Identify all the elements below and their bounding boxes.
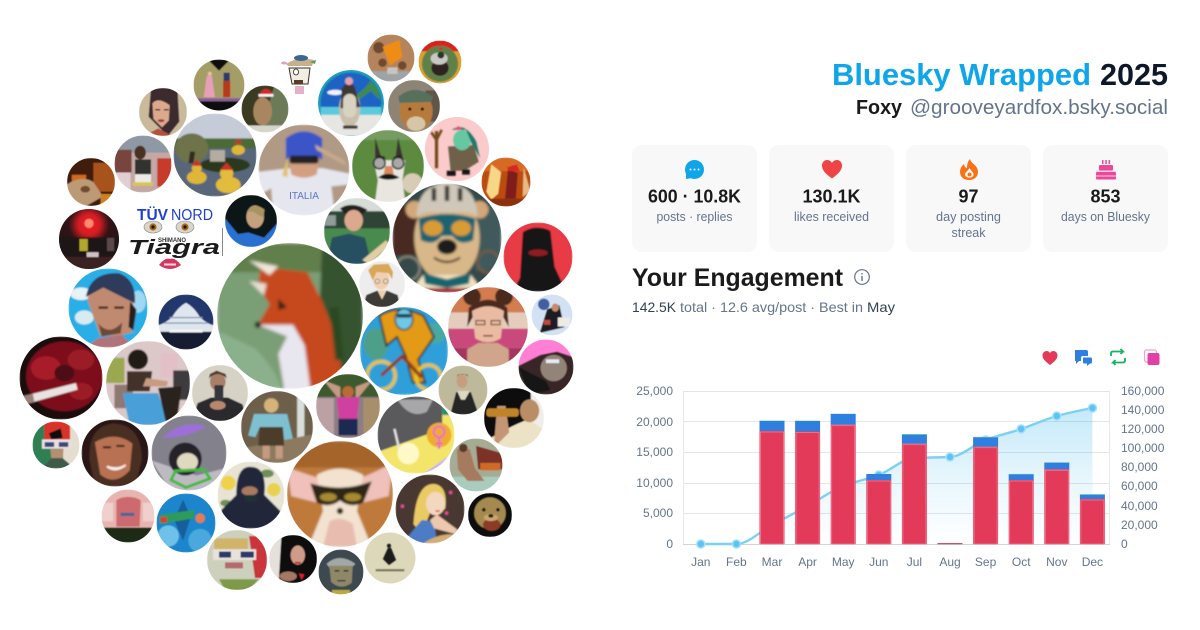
month labels: May: [832, 555, 855, 569]
month labels: Oct: [1012, 555, 1031, 569]
avatar: footballer portrait: [225, 195, 277, 247]
left axis labels: 25,000: [636, 384, 673, 398]
avatar: ducks on island: [174, 114, 256, 196]
month labels: Mar: [762, 555, 782, 569]
avatar: cyclist in Italia kit: ITALIA: [289, 191, 319, 202]
bar: December: [1080, 494, 1105, 544]
left axis labels: [636, 384, 673, 551]
avatar: man with cricket bat: [324, 198, 390, 264]
cumulative line: [701, 408, 1092, 544]
avatar: blue star scene: [156, 494, 216, 552]
stat card: likes received: likes received: [794, 210, 869, 224]
icon: quotes legend: [1144, 350, 1160, 365]
month labels: Dec: [1082, 555, 1103, 569]
avatar: TÜV NORD Shimano Tiagra logo: NORD: [171, 207, 213, 224]
stat card: days on Bluesky: days on Bluesky: [1061, 210, 1151, 224]
stat card: likes received: 130.1K: [802, 186, 860, 206]
avatar: toast with face: [67, 158, 115, 206]
engagement summary: total · 12.6 avg/post · Best in: [680, 299, 863, 315]
right axis labels: 160,000: [1121, 384, 1165, 398]
avatar: Alice: [396, 474, 464, 544]
right axis labels: [1121, 384, 1165, 551]
month labels: Jul: [907, 555, 922, 569]
avatar: fennec with sunglasses: [287, 441, 393, 547]
left axis labels: 10,000: [636, 476, 673, 490]
avatar: painted lady: [438, 366, 488, 414]
month labels: Aug: [939, 555, 961, 569]
stat card: posts and replies: posts · replies: [656, 210, 732, 224]
title: 2025: [1100, 57, 1168, 92]
month labels: Apr: [798, 555, 817, 569]
avatar: mirror selfie: [192, 365, 248, 421]
avatar: dress silhouette card: [364, 532, 416, 584]
avatar: duck with rainbow ring: [418, 40, 462, 84]
left axis labels: 5,000: [643, 506, 673, 520]
right axis labels: 100,000: [1121, 441, 1165, 455]
stat card: days on Bluesky: [1043, 145, 1168, 252]
bar: May: [831, 414, 856, 544]
left axis labels: 0: [666, 537, 673, 551]
avatar: boy in lederhosen: [241, 391, 313, 463]
bar: July: [902, 434, 927, 544]
avatar: woman with buns on stripes: [448, 287, 528, 367]
avatar: troll drawing: [425, 117, 489, 181]
month labels: [691, 555, 1103, 569]
avatar: Morticia portrait: [269, 535, 317, 583]
avatar: cycling bear: [392, 184, 502, 292]
stat card: posts and replies: 600 · 10.8K: [648, 186, 741, 206]
month labels: Sep: [975, 555, 997, 569]
avatar: fire performer: [482, 158, 530, 206]
line markers: [697, 404, 1096, 548]
user handle line: Foxy: [856, 97, 903, 119]
avatar: cyclist in Italia kit: [258, 124, 350, 216]
left axis labels: 15,000: [636, 445, 673, 459]
avatar: TÜV NORD Shimano Tiagra logo: Tiagra: [128, 237, 220, 259]
avatar: woman at desk: [106, 341, 190, 425]
cumulative area: [701, 408, 1092, 544]
bar: April: [795, 420, 820, 544]
avatar: cat with cap: [388, 80, 440, 132]
right axis labels: 120,000: [1121, 422, 1165, 436]
stat card: posts and replies: [632, 145, 757, 252]
icon: likes legend: [1042, 351, 1058, 365]
icon: heart: [822, 160, 842, 178]
month labels: Feb: [726, 555, 747, 569]
avatar: rose with cigarette: [19, 336, 102, 420]
right axis labels: 80,000: [1121, 460, 1158, 474]
stat card: day posting streak: [906, 145, 1031, 252]
icon: replies legend: [1075, 350, 1092, 366]
avatar: pixel goat with hat: [281, 55, 316, 94]
avatar: painted monkey on bike: [360, 307, 448, 395]
avatar: red flare crowd: [59, 209, 119, 269]
bar: June: [866, 474, 891, 544]
bar: March: [760, 420, 784, 544]
icon: flame: [960, 159, 978, 180]
grid lines and axes: [683, 391, 1110, 544]
avatar: vintage cyclist: [318, 550, 364, 594]
avatar: llama with disguise: [352, 130, 424, 202]
left axis labels: 20,000: [636, 415, 673, 429]
right axis labels: 60,000: [1121, 479, 1158, 493]
avatar: woman portrait: [139, 88, 187, 136]
bar: September: [973, 437, 998, 544]
icon: info: [855, 270, 869, 284]
bar: October: [1009, 474, 1034, 544]
avatar: smiling man: [82, 420, 148, 486]
avatar: red balaclava: [504, 222, 572, 292]
avatar: pink cap: [102, 490, 154, 542]
stat card: day posting streak: streak: [952, 226, 986, 240]
stat card: day posting streak: 97: [958, 186, 978, 206]
stat card: likes received: [769, 145, 894, 252]
chart legend: [1042, 349, 1160, 366]
month labels: Nov: [1046, 555, 1067, 569]
avatar: TÜV NORD Shimano Tiagra logo: TÜV: [137, 205, 168, 224]
avatar: lion puppet: [468, 493, 512, 537]
avatar: gym crowd: [114, 136, 172, 192]
avatar: balaclava among lemons: [218, 462, 284, 528]
right axis labels: 0: [1121, 537, 1128, 551]
avatar: bathers: [450, 438, 502, 492]
month labels: Jun: [869, 555, 888, 569]
stacked bar and line chart: [636, 384, 1165, 569]
bar: August: [938, 543, 962, 544]
avatar: green with 3D glasses: [32, 422, 80, 468]
avatar: sketched man: [359, 261, 405, 307]
icon: reposts legend: [1111, 349, 1125, 365]
month labels: Jan: [691, 555, 710, 569]
avatar: dog with santa hat: [242, 86, 288, 132]
avatar: mouse on wood: [368, 34, 414, 82]
right axis labels: 40,000: [1121, 499, 1158, 513]
bar: November: [1044, 462, 1069, 544]
avatar: man with backwards cap: [68, 268, 148, 348]
stat card: days on Bluesky: 853: [1090, 186, 1120, 206]
user handle line: @grooveyardfox.bsky.social: [910, 97, 1168, 119]
avatar: pixel warrior: [532, 294, 572, 336]
engagement summary: May: [867, 299, 895, 315]
right axis labels: 140,000: [1121, 403, 1165, 417]
engagement summary: 142.5K: [632, 299, 677, 315]
avatar: TÜV NORD Shimano Tiagra logo: [128, 205, 223, 269]
avatar cloud: [19, 34, 573, 594]
avatar: sandwich with 3D glasses: [207, 530, 267, 590]
avatar: fox-headed pink cyclist: [316, 374, 380, 438]
heading: your engagement: Your Engagement: [632, 264, 844, 292]
avatar: stacked cloud: [158, 294, 214, 350]
avatar: fox on green: [217, 243, 363, 389]
right axis labels: 20,000: [1121, 518, 1158, 532]
avatar: nutcracker ballet: [194, 60, 244, 112]
stat card: day posting streak: day posting: [936, 210, 1001, 224]
engagement summary: [632, 299, 895, 315]
avatar: pink monkey with keyboard: [518, 340, 574, 394]
title: Bluesky Wrapped: [832, 57, 1091, 92]
bars: monthly engagement: [760, 414, 1105, 544]
avatar: penguin on beach: [318, 70, 384, 136]
avatar: lemon feminist art: [378, 396, 454, 474]
avatar: man with bottle: [484, 388, 544, 448]
avatar: TÜV NORD Shimano Tiagra logo: SHIMANO: [158, 237, 186, 244]
avatar: hedgehog with umbrella: [152, 416, 226, 490]
icon: message bubble: [685, 160, 704, 179]
icon: cake: [1096, 160, 1116, 180]
